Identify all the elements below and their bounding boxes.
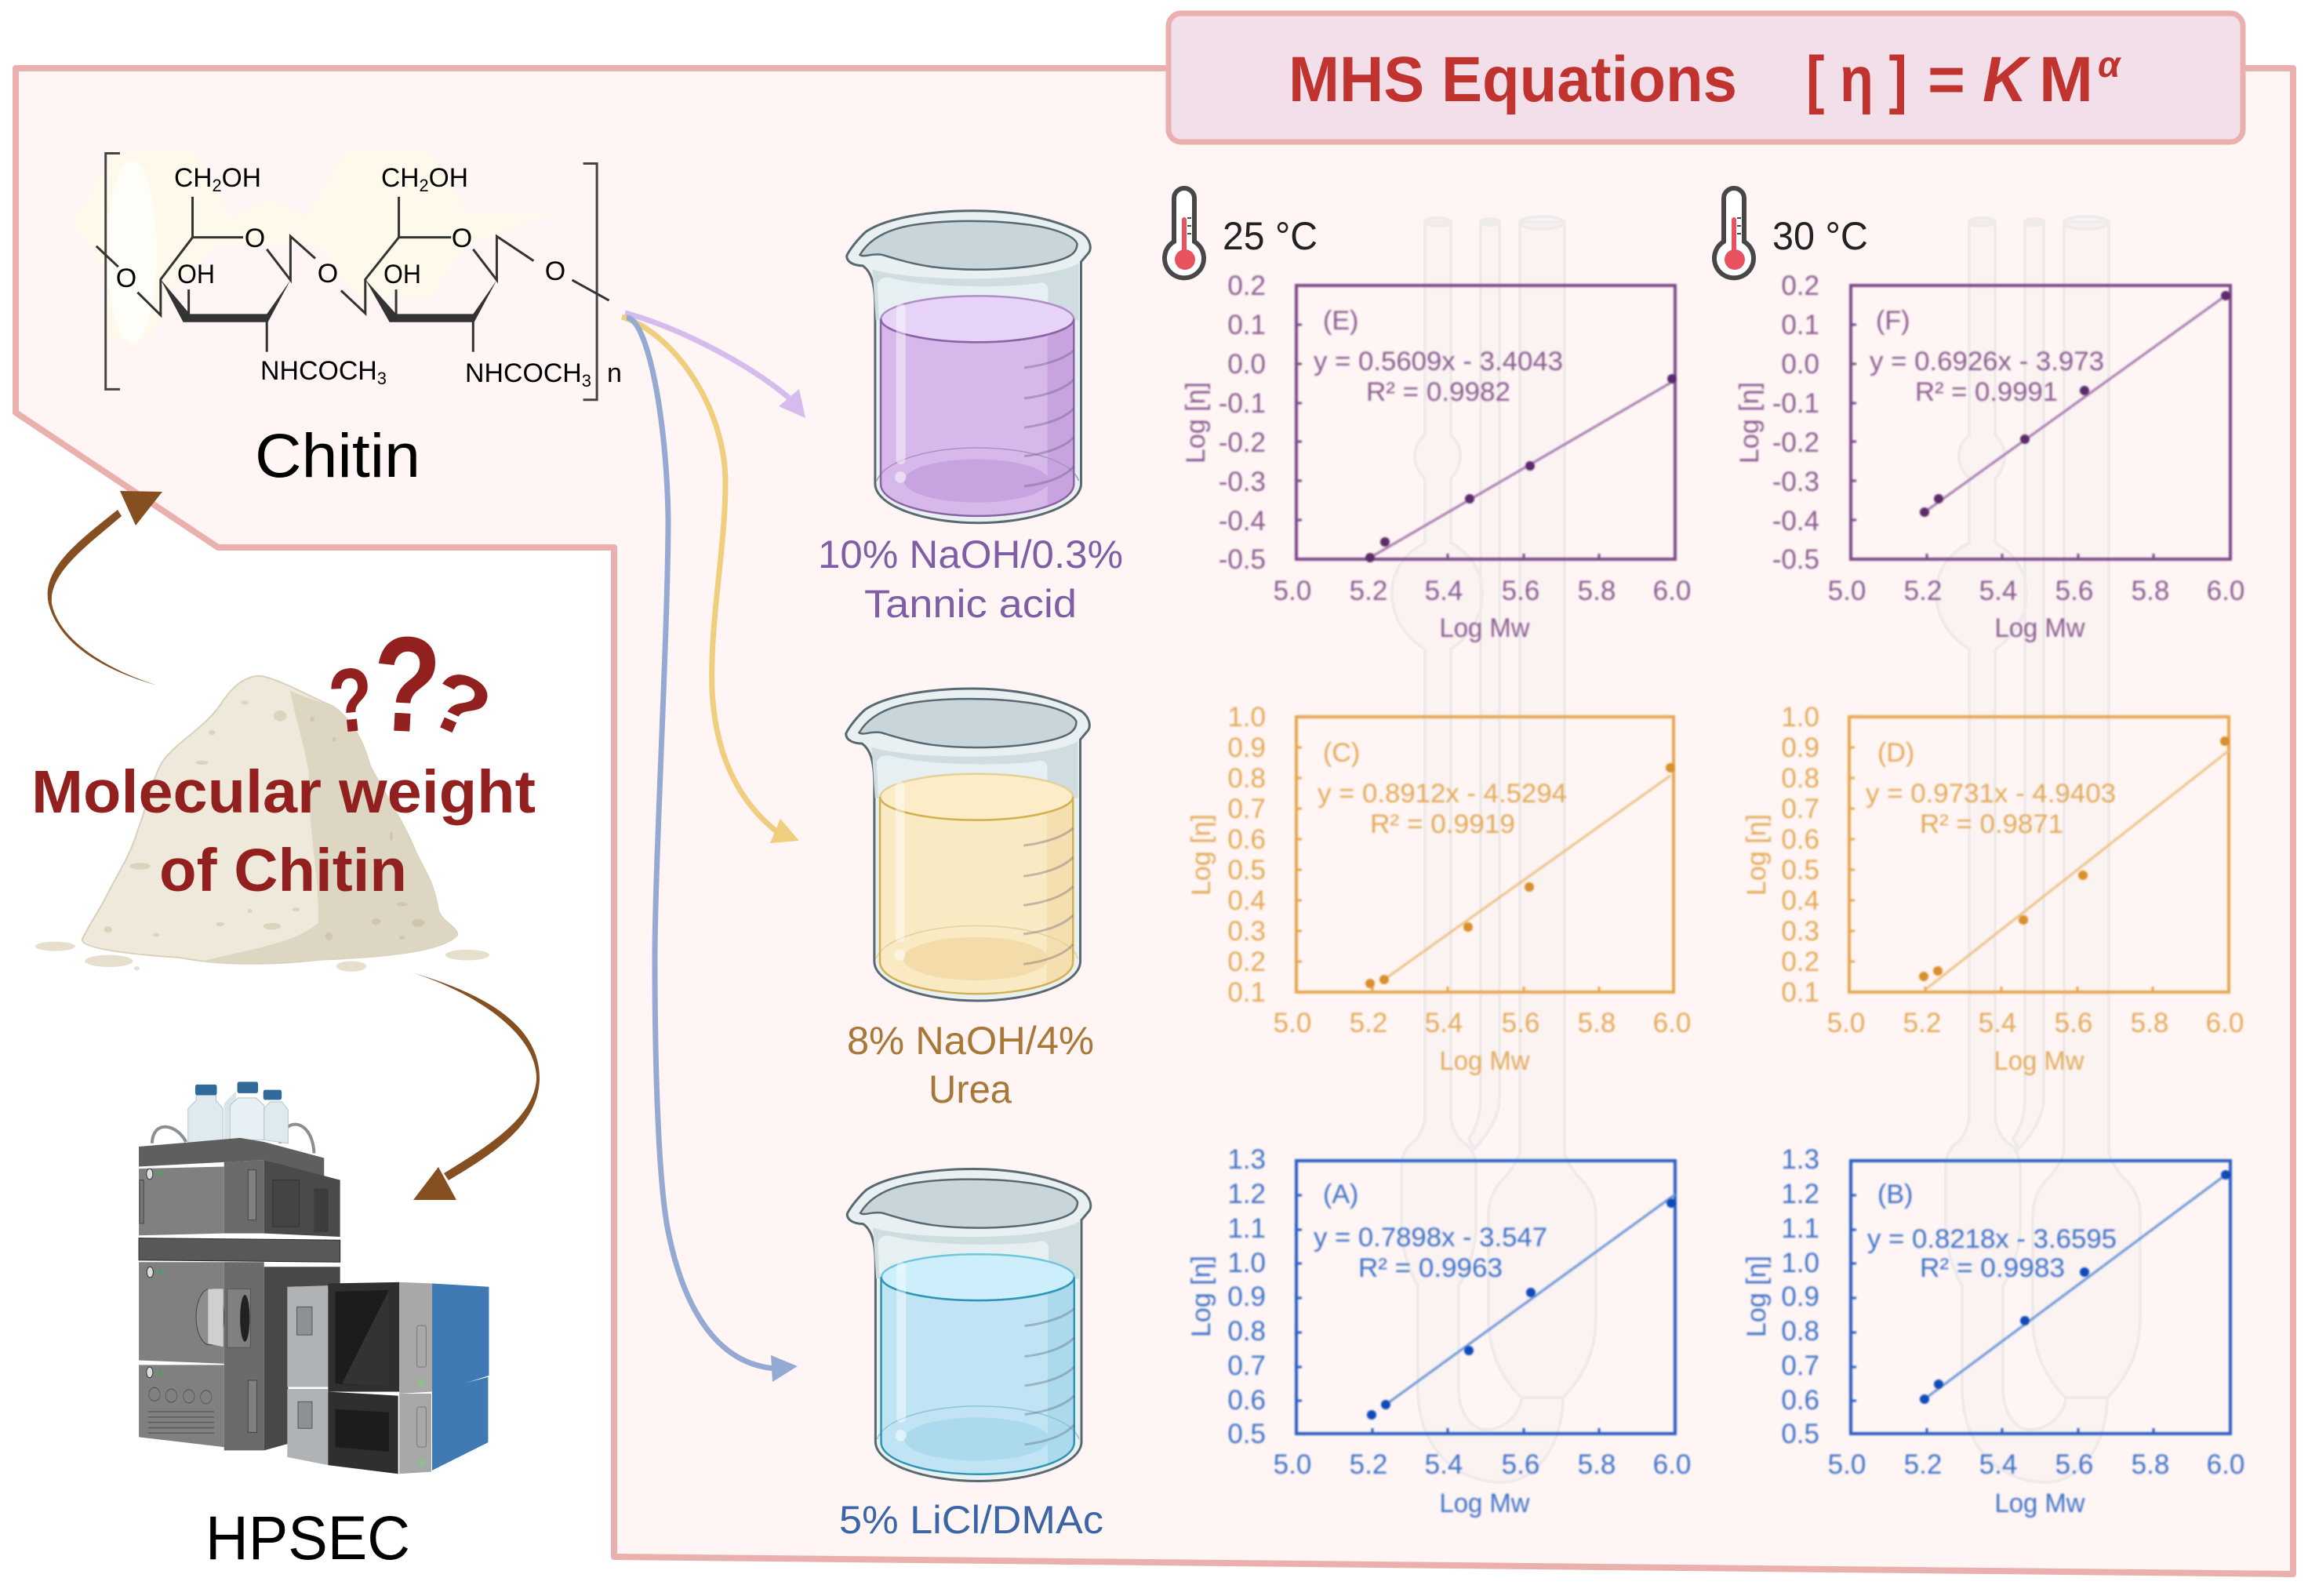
chart B: LiCl/DMAc 30 °C: 6.0 bbox=[2207, 1449, 2244, 1480]
header banner: MHS equations: = bbox=[1928, 44, 1965, 115]
chart D: urea 30 °C: y = 0.9731x - 4.9403 bbox=[1866, 779, 2116, 809]
chart D: urea 30 °C bbox=[1742, 702, 2244, 1076]
chart D: urea 30 °C: 5.6 bbox=[2055, 1008, 2092, 1038]
chitin structure diagram: n bbox=[607, 358, 622, 388]
chart C: urea 25 °C: 5.6 bbox=[1502, 1008, 1539, 1038]
chart E: tannic acid 25 °C: R² = 0.9982 bbox=[1366, 377, 1510, 407]
chart A: LiCl/DMAc 25 °C: y = 0.7898x - 3.547 bbox=[1314, 1223, 1547, 1252]
chart C: urea 25 °C: 0.3 bbox=[1227, 916, 1266, 947]
icon: beaker purple bbox=[847, 211, 1090, 523]
arrow: powder to HPSEC bbox=[413, 973, 540, 1200]
chart D: urea 30 °C: 5.0 bbox=[1827, 1008, 1865, 1038]
chart E: tannic acid 25 °C: 0.0 bbox=[1227, 349, 1266, 380]
chart A: LiCl/DMAc 25 °C: 5.0 bbox=[1274, 1449, 1311, 1480]
chart F: tannic acid 30 °C: 0.0 bbox=[1781, 349, 1819, 380]
chart C: urea 25 °C: 0.7 bbox=[1227, 794, 1266, 824]
chart F: tannic acid 30 °C: 5.4 bbox=[1979, 576, 2017, 606]
chart A: LiCl/DMAc 25 °C: 0.7 bbox=[1227, 1351, 1266, 1381]
chitin structure diagram: O bbox=[116, 264, 136, 293]
chart F: tannic acid 30 °C: 0.1 bbox=[1781, 310, 1819, 340]
arrow: chitin to urea solvent bbox=[622, 317, 799, 843]
chart F: tannic acid 30 °C: Log [η] bbox=[1735, 382, 1765, 464]
icon: beaker yellow bbox=[846, 689, 1089, 1001]
chart D: urea 30 °C: 0.9 bbox=[1781, 733, 1819, 763]
chart B: LiCl/DMAc 30 °C: 1.0 bbox=[1781, 1248, 1819, 1278]
chart F: tannic acid 30 °C: 6.0 bbox=[2207, 576, 2244, 606]
chart F: tannic acid 30 °C: y = 0.6926x - 3.973 bbox=[1870, 347, 2104, 376]
chart C: urea 25 °C: 5.8 bbox=[1578, 1008, 1616, 1038]
chart E: tannic acid 25 °C bbox=[1181, 271, 1691, 643]
chart C: urea 25 °C: 0.1 bbox=[1227, 977, 1266, 1008]
header banner: MHS equations: M bbox=[2039, 44, 2093, 115]
chart F: tannic acid 30 °C: 5.8 bbox=[2132, 576, 2169, 606]
question marks: ? bbox=[324, 649, 379, 753]
chart E: tannic acid 25 °C: 0.2 bbox=[1227, 271, 1266, 301]
header banner: MHS equations: MHS Equations bbox=[1288, 44, 1737, 115]
chart E: tannic acid 25 °C: 5.8 bbox=[1578, 576, 1616, 606]
label: 8% NaOH/4% Urea: Urea bbox=[929, 1067, 1012, 1111]
chart E: tannic acid 25 °C: -0.2 bbox=[1219, 427, 1266, 458]
chitin structure diagram: OH bbox=[383, 260, 421, 289]
chart D: urea 30 °C: 5.8 bbox=[2131, 1008, 2168, 1038]
chart A: LiCl/DMAc 25 °C: Log Mw bbox=[1440, 1489, 1530, 1518]
chart D: urea 30 °C: 0.1 bbox=[1781, 977, 1819, 1008]
chart B: LiCl/DMAc 30 °C: Log Mw bbox=[1995, 1489, 2085, 1518]
chart B: LiCl/DMAc 30 °C: y = 0.8218x - 3.6595 bbox=[1867, 1224, 2117, 1254]
chart C: urea 25 °C: 6.0 bbox=[1653, 1008, 1691, 1038]
chart E: tannic acid 25 °C: Log [η] bbox=[1181, 382, 1211, 464]
chart F: tannic acid 30 °C: -0.5 bbox=[1772, 544, 1819, 575]
title: Molecular weight of Chitin: of Chitin bbox=[159, 837, 407, 904]
chart D: urea 30 °C: 1.0 bbox=[1781, 702, 1819, 733]
chart E: tannic acid 25 °C: 5.4 bbox=[1425, 576, 1463, 606]
chart A: LiCl/DMAc 25 °C: 1.3 bbox=[1227, 1144, 1266, 1175]
powder pile bbox=[35, 676, 489, 972]
chart E: tannic acid 25 °C: y = 0.5609x - 3.4043 bbox=[1314, 347, 1563, 376]
chart D: urea 30 °C: 6.0 bbox=[2206, 1008, 2244, 1038]
chart C: urea 25 °C: 5.0 bbox=[1274, 1008, 1311, 1038]
label: 5% LiCl/DMAc: 5% LiCl/DMAc bbox=[839, 1498, 1103, 1542]
chart F: tannic acid 30 °C: -0.3 bbox=[1772, 467, 1819, 497]
chitin structure diagram: 3 bbox=[377, 369, 387, 388]
chart A: LiCl/DMAc 25 °C: 6.0 bbox=[1653, 1449, 1691, 1480]
arrow: powder to chitin structure bbox=[48, 491, 162, 686]
header banner: MHS equations: [ η ] bbox=[1806, 44, 1907, 115]
chart A: LiCl/DMAc 25 °C: 0.6 bbox=[1227, 1385, 1266, 1416]
chart B: LiCl/DMAc 30 °C: 0.9 bbox=[1781, 1282, 1819, 1312]
label: 8% NaOH/4% Urea bbox=[847, 1019, 1094, 1111]
icon: viscometer 25 °C column bbox=[1392, 216, 1596, 1482]
chart D: urea 30 °C: 0.4 bbox=[1781, 885, 1819, 916]
chitin structure diagram: O bbox=[245, 224, 265, 253]
label: 25 °C: 25 °C bbox=[1223, 214, 1318, 258]
chart F: tannic acid 30 °C: 0.2 bbox=[1781, 271, 1819, 301]
chart D: urea 30 °C: 5.2 bbox=[1903, 1008, 1941, 1038]
chitin structure diagram: OH bbox=[429, 163, 468, 193]
chart B: LiCl/DMAc 30 °C: 5.4 bbox=[1979, 1449, 2017, 1480]
chart B: LiCl/DMAc 30 °C: (B) bbox=[1877, 1180, 1913, 1209]
chart B: LiCl/DMAc 30 °C: Log [η] bbox=[1742, 1256, 1772, 1337]
chart A: LiCl/DMAc 25 °C: 5.8 bbox=[1578, 1449, 1616, 1480]
chitin structure diagram: 2 bbox=[420, 176, 429, 195]
chart B: LiCl/DMAc 30 °C: 5.6 bbox=[2055, 1449, 2093, 1480]
chart B: LiCl/DMAc 30 °C: 0.7 bbox=[1781, 1351, 1819, 1381]
chart F: tannic acid 30 °C: 5.2 bbox=[1904, 576, 1942, 606]
chart B: LiCl/DMAc 30 °C: 0.6 bbox=[1781, 1385, 1819, 1416]
chart B: LiCl/DMAc 30 °C: R² = 0.9983 bbox=[1920, 1253, 2065, 1283]
icon: beaker blue bbox=[847, 1169, 1091, 1481]
arrow: chitin to LiCl/DMAc solvent bbox=[627, 318, 798, 1382]
label: 8% NaOH/4% Urea: 8% NaOH/4% bbox=[847, 1019, 1094, 1063]
chart A: LiCl/DMAc 25 °C: Log [η] bbox=[1187, 1256, 1216, 1337]
chart F: tannic acid 30 °C: -0.2 bbox=[1772, 427, 1819, 458]
chitin structure diagram bbox=[71, 151, 622, 400]
chart C: urea 25 °C: Log Mw bbox=[1440, 1046, 1530, 1076]
chart F: tannic acid 30 °C: -0.4 bbox=[1772, 506, 1819, 536]
chart F: tannic acid 30 °C: R² = 0.9991 bbox=[1915, 377, 2058, 407]
arrow: chitin to tannic acid solvent bbox=[625, 313, 805, 418]
chart E: tannic acid 25 °C: 5.0 bbox=[1274, 576, 1311, 606]
chart A: LiCl/DMAc 25 °C: 5.2 bbox=[1350, 1449, 1387, 1480]
chart D: urea 30 °C: (D) bbox=[1877, 738, 1914, 768]
chart F: tannic acid 30 °C: 5.6 bbox=[2055, 576, 2093, 606]
chitin structure diagram: OH bbox=[222, 163, 261, 193]
chart B: LiCl/DMAc 30 °C: 5.0 bbox=[1828, 1449, 1866, 1480]
chitin structure diagram: CH bbox=[381, 163, 420, 193]
chart A: LiCl/DMAc 25 °C: 5.4 bbox=[1425, 1449, 1463, 1480]
chart B: LiCl/DMAc 30 °C: 1.3 bbox=[1781, 1144, 1819, 1175]
chart D: urea 30 °C: 0.7 bbox=[1781, 794, 1819, 824]
icon: HPSEC instrument bbox=[139, 1082, 489, 1474]
chart B: LiCl/DMAc 30 °C: 1.2 bbox=[1781, 1179, 1819, 1209]
question marks: ? bbox=[415, 650, 504, 758]
chart F: tannic acid 30 °C: (F) bbox=[1876, 306, 1910, 336]
header banner: MHS equations bbox=[1169, 13, 2243, 142]
chart F: tannic acid 30 °C: Log Mw bbox=[1995, 613, 2085, 643]
chart C: urea 25 °C: Log [η] bbox=[1187, 814, 1216, 896]
chart D: urea 30 °C: 0.3 bbox=[1781, 916, 1819, 947]
chitin structure diagram: OH bbox=[177, 260, 215, 289]
chitin structure diagram: 3 bbox=[582, 371, 591, 391]
chart A: LiCl/DMAc 25 °C: 5.6 bbox=[1502, 1449, 1539, 1480]
chart E: tannic acid 25 °C: -0.3 bbox=[1219, 467, 1266, 497]
label: 10% NaOH/0.3% Tannic acid bbox=[818, 533, 1123, 626]
chart C: urea 25 °C: 1.0 bbox=[1227, 702, 1266, 733]
chart E: tannic acid 25 °C: Log Mw bbox=[1440, 613, 1530, 643]
label: 30 °C: 30 °C bbox=[1772, 214, 1868, 258]
chitin structure diagram: O bbox=[318, 259, 338, 289]
chart C: urea 25 °C: 0.6 bbox=[1227, 824, 1266, 855]
chart C: urea 25 °C: 0.4 bbox=[1227, 885, 1266, 916]
chart D: urea 30 °C: 0.6 bbox=[1781, 824, 1819, 855]
chart A: LiCl/DMAc 25 °C bbox=[1187, 1144, 1691, 1518]
chart E: tannic acid 25 °C: -0.1 bbox=[1219, 388, 1266, 419]
icon: thermometer 25 °C bbox=[1165, 188, 1204, 278]
chart D: urea 30 °C: R² = 0.9871 bbox=[1920, 809, 2063, 839]
chart F: tannic acid 30 °C: 5.0 bbox=[1828, 576, 1866, 606]
chart E: tannic acid 25 °C: 5.6 bbox=[1502, 576, 1539, 606]
chart D: urea 30 °C: 0.5 bbox=[1781, 855, 1819, 885]
chart B: LiCl/DMAc 30 °C: 5.8 bbox=[2132, 1449, 2169, 1480]
chitin structure diagram: NHCOCH bbox=[465, 358, 582, 388]
chart E: tannic acid 25 °C: -0.4 bbox=[1219, 506, 1266, 536]
chart C: urea 25 °C bbox=[1187, 702, 1691, 1076]
label: 10% NaOH/0.3% Tannic acid: Tannic acid bbox=[864, 582, 1077, 626]
chart D: urea 30 °C: 5.4 bbox=[1979, 1008, 2016, 1038]
chart E: tannic acid 25 °C: (E) bbox=[1323, 306, 1358, 336]
chart B: LiCl/DMAc 30 °C: 0.8 bbox=[1781, 1316, 1819, 1347]
chart B: LiCl/DMAc 30 °C: 1.1 bbox=[1781, 1213, 1819, 1244]
chart C: urea 25 °C: (C) bbox=[1323, 738, 1360, 768]
label: HPSEC: HPSEC bbox=[205, 1503, 410, 1572]
chart C: urea 25 °C: 5.2 bbox=[1350, 1008, 1387, 1038]
chart F: tannic acid 30 °C: -0.1 bbox=[1772, 388, 1819, 419]
chart E: tannic acid 25 °C: 0.1 bbox=[1227, 310, 1266, 340]
chart C: urea 25 °C: 0.2 bbox=[1227, 947, 1266, 977]
chart D: urea 30 °C: 0.2 bbox=[1781, 947, 1819, 977]
chart A: LiCl/DMAc 25 °C: 0.5 bbox=[1227, 1419, 1266, 1449]
chart A: LiCl/DMAc 25 °C: R² = 0.9963 bbox=[1358, 1253, 1503, 1283]
header banner: MHS equations: α bbox=[2098, 44, 2122, 85]
chart A: LiCl/DMAc 25 °C: 1.0 bbox=[1227, 1248, 1266, 1278]
chart A: LiCl/DMAc 25 °C: 0.8 bbox=[1227, 1316, 1266, 1347]
chart C: urea 25 °C: 0.8 bbox=[1227, 763, 1266, 794]
chart C: urea 25 °C: R² = 0.9919 bbox=[1370, 809, 1515, 839]
chart D: urea 30 °C: Log [η] bbox=[1742, 814, 1772, 896]
chart B: LiCl/DMAc 30 °C: 0.5 bbox=[1781, 1419, 1819, 1449]
chart A: LiCl/DMAc 25 °C: 1.2 bbox=[1227, 1179, 1266, 1209]
chart B: LiCl/DMAc 30 °C: 5.2 bbox=[1904, 1449, 1942, 1480]
title: Molecular weight of Chitin bbox=[31, 758, 536, 904]
question marks: ? bbox=[369, 607, 445, 762]
chart E: tannic acid 25 °C: -0.5 bbox=[1219, 544, 1266, 575]
chart A: LiCl/DMAc 25 °C: 1.1 bbox=[1227, 1213, 1266, 1244]
chart E: tannic acid 25 °C: 5.2 bbox=[1350, 576, 1387, 606]
chart D: urea 30 °C: Log Mw bbox=[1994, 1046, 2084, 1076]
chart B: LiCl/DMAc 30 °C bbox=[1742, 1144, 2244, 1518]
chitin structure diagram: O bbox=[545, 256, 565, 286]
label: 10% NaOH/0.3% Tannic acid: 10% NaOH/0.3% bbox=[818, 533, 1123, 576]
chart C: urea 25 °C: 0.5 bbox=[1227, 855, 1266, 885]
header banner: MHS equations: K bbox=[1983, 44, 2032, 115]
chart F: tannic acid 30 °C bbox=[1735, 271, 2244, 643]
title: Molecular weight of Chitin: Molecular weight bbox=[31, 758, 536, 826]
label: Chitin: Chitin bbox=[255, 420, 420, 490]
icon: viscometer 30 °C column bbox=[1936, 216, 2140, 1482]
chart D: urea 30 °C: 0.8 bbox=[1781, 763, 1819, 794]
question marks bbox=[324, 607, 504, 762]
chitin structure diagram: O bbox=[452, 224, 472, 253]
chart C: urea 25 °C: 0.9 bbox=[1227, 733, 1266, 763]
chart C: urea 25 °C: y = 0.8912x - 4.5294 bbox=[1318, 779, 1567, 809]
chitin structure diagram: NHCOCH bbox=[260, 356, 377, 386]
chitin structure diagram: 2 bbox=[213, 176, 222, 195]
chart E: tannic acid 25 °C: 6.0 bbox=[1653, 576, 1691, 606]
chitin structure diagram: CH bbox=[174, 163, 213, 193]
chart A: LiCl/DMAc 25 °C: 0.9 bbox=[1227, 1282, 1266, 1312]
chart A: LiCl/DMAc 25 °C: (A) bbox=[1323, 1180, 1358, 1209]
chart C: urea 25 °C: 5.4 bbox=[1425, 1008, 1463, 1038]
icon: thermometer 30 °C bbox=[1714, 188, 1754, 278]
